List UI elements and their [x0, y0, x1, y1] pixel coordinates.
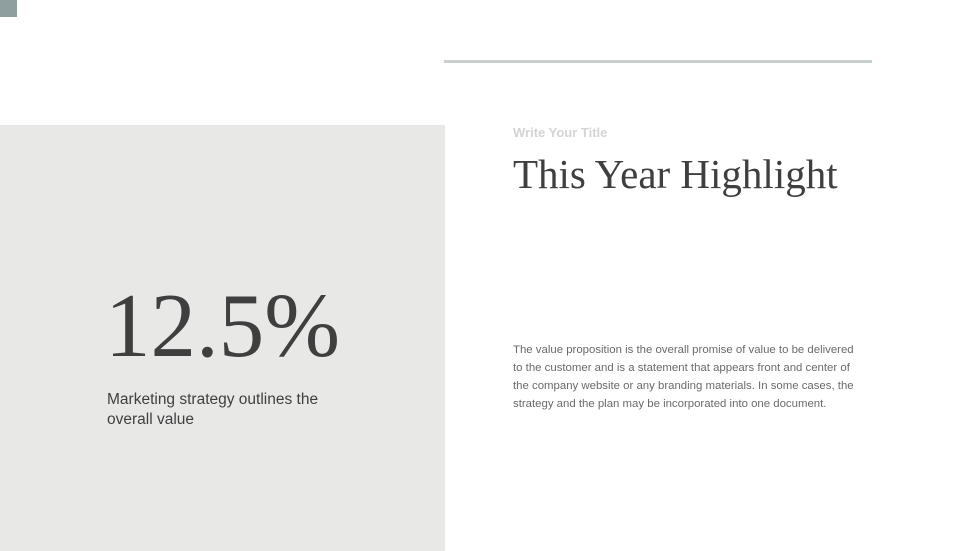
panel: left grey — [0, 125, 445, 551]
top line — [444, 60, 872, 63]
corner square — [0, 0, 17, 17]
body text: The value proposition is the overall promise of value to be delivered to the customer and is a statement that appears front and center of the company website or any branding materials. In some cases, the strategy and the plan may be incorporated into one document. — [513, 344, 854, 410]
big number: 12.5% — [105, 275, 340, 376]
title: This Year Highlight — [513, 151, 838, 197]
caption: Marketing strategy outlines the overall value — [107, 391, 318, 428]
subtitle: Write Your Title — [513, 125, 607, 140]
